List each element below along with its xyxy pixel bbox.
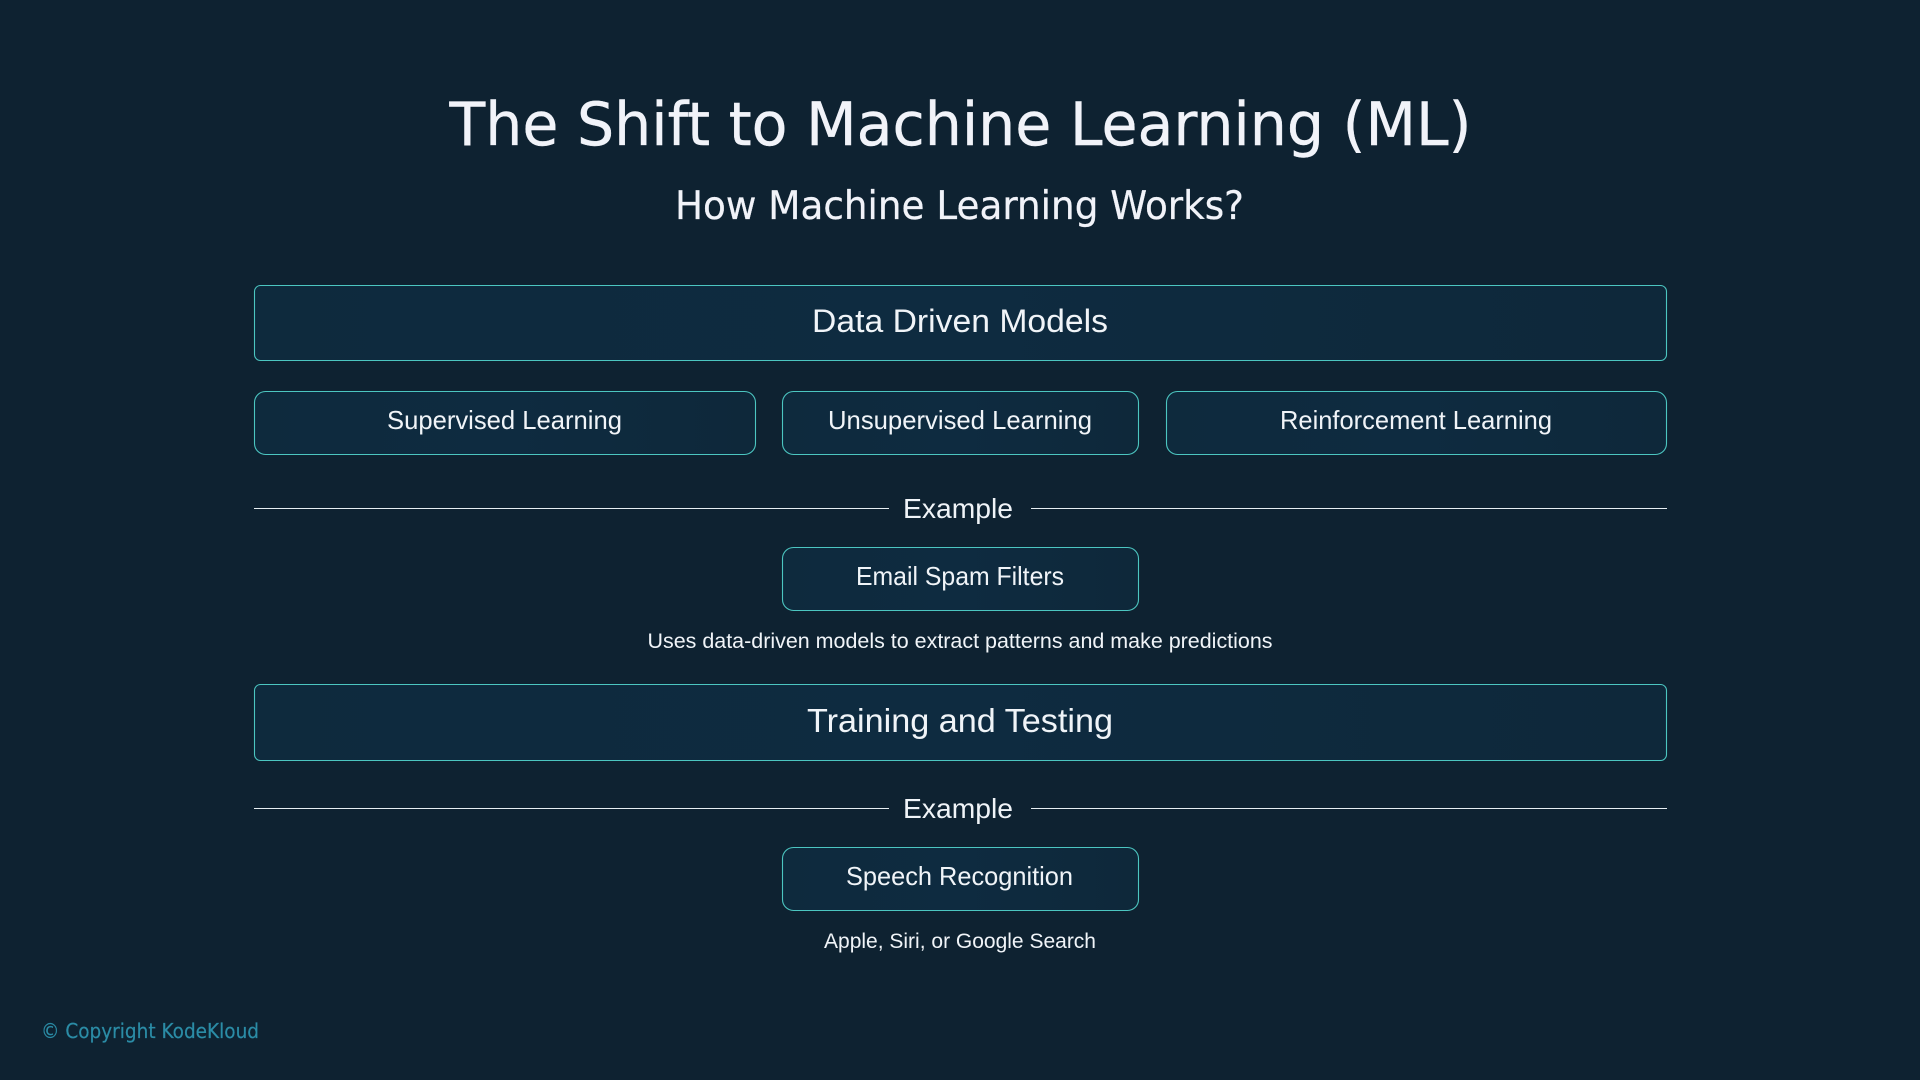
title: The Shift to Machine Learning (ML) [449, 90, 1472, 160]
divider: example 2: Example [903, 793, 1013, 824]
panel: speech recognition [782, 848, 1138, 910]
text: speech description: Apple, Siri, or Google Search [824, 930, 1096, 953]
panel: unsupervised learning [782, 392, 1138, 454]
divider: example 1: Example [903, 493, 1013, 524]
copyright: © Copyright KodeKloud [41, 1019, 259, 1043]
text: email description: Uses data-driven models to extract patterns and make predictions [648, 630, 1272, 653]
panel: training and testing: Training and Testing [807, 702, 1113, 739]
panel: data driven models: Data Driven Models [812, 303, 1108, 339]
panel: unsupervised learning: Unsupervised Learning [828, 405, 1092, 435]
panel: speech recognition: Speech Recognition [846, 861, 1073, 891]
subtitle: How Machine Learning Works? [675, 184, 1244, 229]
panel: reinforcement learning [1166, 392, 1666, 454]
panel: email spam filters: Email Spam Filters [856, 561, 1064, 591]
panel: reinforcement learning: Reinforcement Learning [1280, 405, 1552, 435]
panel: supervised learning [254, 392, 756, 454]
panel: training and testing [254, 684, 1666, 760]
panel: supervised learning: Supervised Learning [387, 405, 622, 435]
panel: email spam filters [782, 548, 1138, 610]
panel: data driven models [254, 286, 1666, 360]
